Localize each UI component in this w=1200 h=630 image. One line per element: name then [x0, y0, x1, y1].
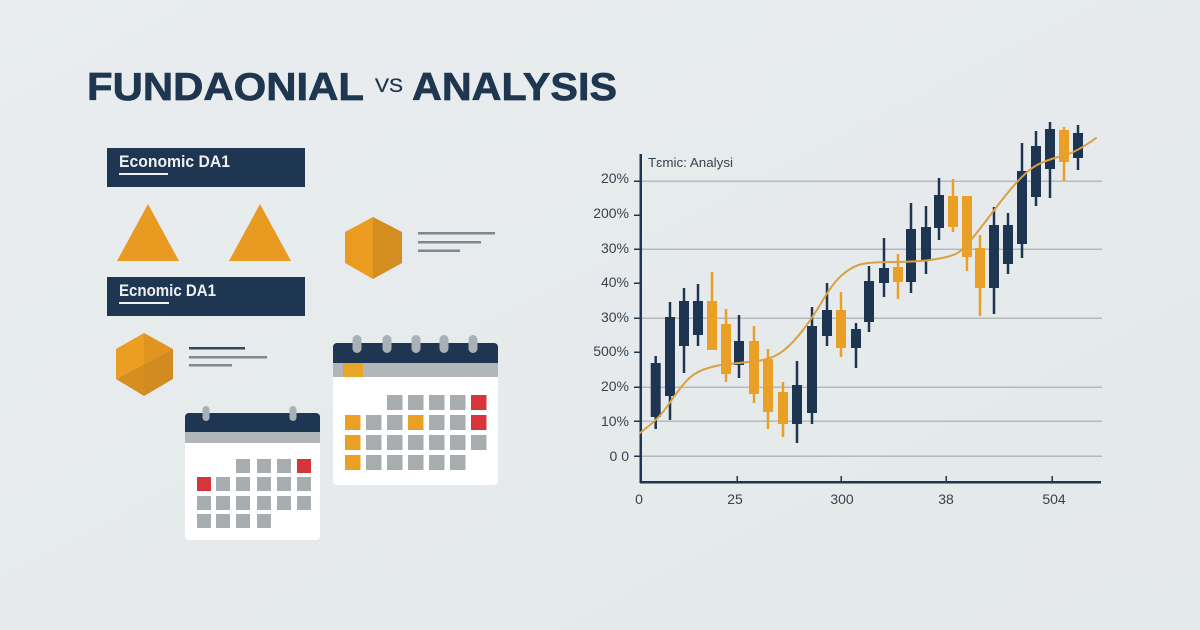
horizontal grid lines: [641, 180, 1102, 457]
x axis labels: 25: [727, 491, 743, 507]
title: FUNDAONIAL: [87, 66, 364, 109]
title: ANALYSIS: [412, 66, 617, 109]
x axis labels: 504: [1042, 491, 1066, 507]
calendar rings: [352, 335, 478, 353]
small calendar rings: [202, 406, 296, 421]
text block: upper hexagon lines: [418, 232, 495, 252]
y axis labels: 30%: [601, 309, 629, 325]
panel: small calendar: [185, 406, 320, 540]
orange candles: [707, 127, 1069, 437]
panel: economic data upper banner: [107, 148, 305, 187]
panel: economic data upper banner: Economic DA1: [119, 152, 230, 171]
icon: triangle right: [229, 204, 291, 261]
chart: technical analysis candlesticks: [593, 122, 1102, 507]
x axis labels: 0: [635, 491, 643, 507]
chart title: Tɛmic: Analysi: [648, 155, 733, 170]
calendar day cells: [345, 395, 486, 470]
y axis labels: 20%: [601, 170, 629, 186]
y axis labels: 500%: [593, 343, 629, 359]
y axis labels: 40%: [601, 274, 629, 290]
y axis labels: [593, 170, 629, 464]
trend line: [640, 138, 1096, 433]
icon: upper hexagon: [345, 217, 402, 279]
y axis labels: 0 0: [610, 448, 629, 464]
title: [87, 66, 617, 109]
panel: large calendar: [333, 335, 498, 485]
panel: economic data lower banner: Ecnomic DA1: [119, 281, 216, 300]
panel: economic data lower banner: [107, 277, 305, 316]
icon: lower hexagon: [116, 333, 173, 396]
y axis labels: 200%: [593, 205, 629, 221]
navy candles: [651, 122, 1083, 443]
x axis labels: 300: [830, 491, 854, 507]
y axis labels: 10%: [601, 413, 629, 429]
text block: lower hexagon lines: [189, 347, 267, 366]
x axis labels: [635, 491, 1066, 507]
icon: triangle left: [117, 204, 179, 261]
title: VS: [375, 76, 403, 97]
y axis labels: 30%: [601, 240, 629, 256]
small calendar day cells: [197, 459, 311, 528]
x axis labels: 38: [938, 491, 954, 507]
axes and ticks: [634, 154, 1101, 484]
y axis labels: 20%: [601, 378, 629, 394]
